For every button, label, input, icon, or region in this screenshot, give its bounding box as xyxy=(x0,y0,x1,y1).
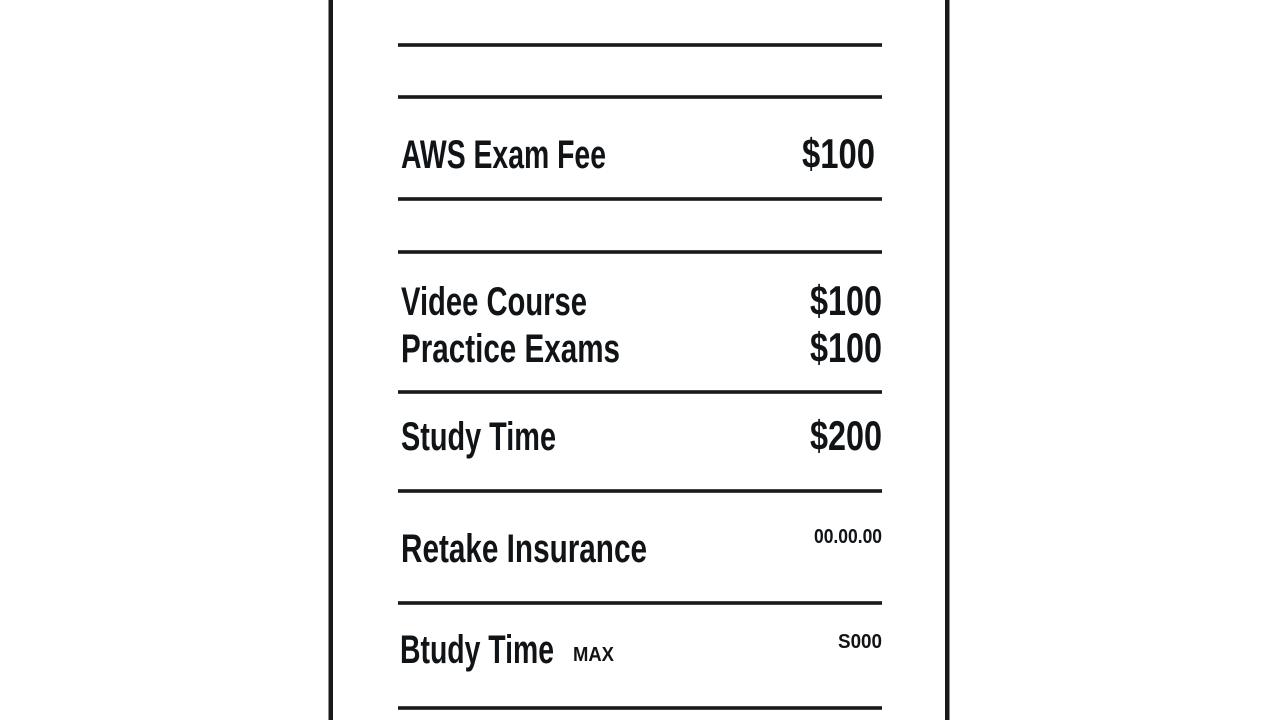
row: practice exams xyxy=(401,324,882,371)
row: AWS exam fee: AWS Exam Fee xyxy=(401,133,606,177)
row: retake insurance: Retake Insurance xyxy=(401,527,647,571)
row: study time xyxy=(401,412,882,459)
row: video course xyxy=(401,277,882,324)
row: practice exams: $100 xyxy=(810,324,882,371)
row: second study time: S000 xyxy=(838,631,882,653)
row: video course: $100 xyxy=(810,277,882,324)
row: video course: Videe Course xyxy=(401,280,587,324)
row: AWS exam fee: $100 xyxy=(802,130,875,177)
row: practice exams: Practice Exams xyxy=(401,327,620,371)
row: AWS exam fee xyxy=(401,130,875,177)
row: study time: $200 xyxy=(810,412,882,459)
row: retake insurance xyxy=(401,526,882,571)
panel: receipt frame xyxy=(328,0,950,720)
row: second study time xyxy=(400,628,882,672)
row: study time: Study Time xyxy=(401,415,556,459)
row: retake insurance: 00.00.00 xyxy=(814,526,882,548)
row: second study time: Btudy Time xyxy=(400,628,554,672)
row: second study time: MAX xyxy=(573,644,615,666)
